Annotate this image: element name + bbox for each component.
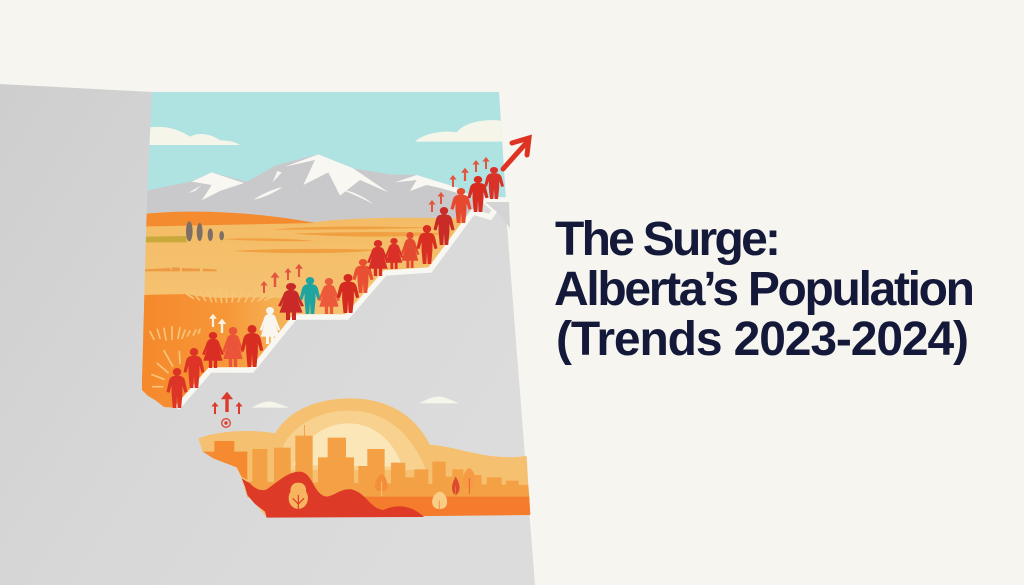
orange tree xyxy=(375,474,388,497)
figure 9 xyxy=(318,278,340,314)
orange tree right xyxy=(463,468,476,494)
title line 1: The Surge: xyxy=(555,213,781,266)
snow caps xyxy=(188,154,470,204)
arrow xyxy=(428,200,436,212)
prairie streaks xyxy=(220,227,453,253)
trees xyxy=(186,221,224,241)
olive band xyxy=(145,236,187,242)
sun inner disc xyxy=(293,423,402,467)
staircase: white rising line xyxy=(177,200,510,408)
figure 18 xyxy=(468,176,488,212)
sun middle ring xyxy=(283,411,426,470)
title line 2: Alberta’s Population xyxy=(554,263,975,316)
cloud left xyxy=(147,127,240,145)
figure 3 xyxy=(202,332,224,368)
figure 16 xyxy=(434,207,454,245)
figure 10 xyxy=(337,274,359,313)
sun outer ring xyxy=(275,398,430,480)
lower gray-zone arrows and target icon xyxy=(211,392,243,427)
figure 7 xyxy=(278,283,304,320)
arrow xyxy=(472,160,480,172)
sky xyxy=(140,90,510,220)
figure 17 xyxy=(450,188,472,223)
arrow xyxy=(461,168,469,181)
population figures climbing the stairs xyxy=(166,167,504,408)
figure 15 xyxy=(416,225,438,264)
orange ground xyxy=(363,497,530,517)
figure 8: teal xyxy=(300,277,320,314)
title line 3: (Trends 2023-2024) xyxy=(556,313,969,366)
broken field streak xyxy=(144,267,217,271)
illustrated upper map: sky, mountains and prairie xyxy=(140,90,510,410)
lower orange field and sunbursts xyxy=(140,267,297,410)
figure 5 xyxy=(241,325,263,367)
cloud xyxy=(252,401,289,408)
sunburst strokes xyxy=(150,290,273,387)
arrow xyxy=(218,319,226,333)
large red growth arrow xyxy=(503,138,529,169)
left dark skyline xyxy=(203,441,247,480)
red hill xyxy=(242,472,424,518)
orange field xyxy=(140,294,297,410)
white up arrows xyxy=(209,314,226,333)
arrow xyxy=(260,281,268,293)
big arrow xyxy=(221,392,233,412)
title xyxy=(554,213,975,366)
small up arrows above figures xyxy=(260,157,490,293)
arrow xyxy=(449,175,457,187)
tree in hill xyxy=(289,483,308,509)
figure 6: white xyxy=(260,307,280,344)
mountains xyxy=(147,154,480,225)
figure 2 xyxy=(184,348,204,388)
figure 12 xyxy=(367,240,389,276)
right arrow xyxy=(235,402,243,414)
figure 19 xyxy=(484,167,504,199)
figure 14 xyxy=(401,232,419,268)
arrow xyxy=(209,314,217,327)
arrow xyxy=(295,264,303,277)
arrow xyxy=(270,272,280,287)
cloud xyxy=(419,397,459,403)
figure 13 xyxy=(385,238,403,269)
skyline buildings xyxy=(247,425,529,497)
target icon xyxy=(222,419,230,427)
figure 1 xyxy=(166,368,188,408)
land base xyxy=(198,431,530,517)
arrow xyxy=(482,157,490,169)
figure 11 xyxy=(352,259,374,293)
southern city panel with sun and skyline xyxy=(198,398,530,518)
left arrow xyxy=(211,402,219,414)
small clouds over gray xyxy=(252,397,459,408)
pale tree xyxy=(432,492,447,510)
cloud right xyxy=(415,120,503,142)
prairie base xyxy=(140,218,473,352)
arrow xyxy=(437,192,445,204)
orange hill xyxy=(140,212,315,227)
red tree xyxy=(452,477,460,497)
top landing block xyxy=(485,202,510,228)
clouds and mountains xyxy=(140,120,503,352)
gray province landmass xyxy=(0,84,535,585)
figure 4 xyxy=(222,327,244,367)
arrow xyxy=(284,268,292,280)
